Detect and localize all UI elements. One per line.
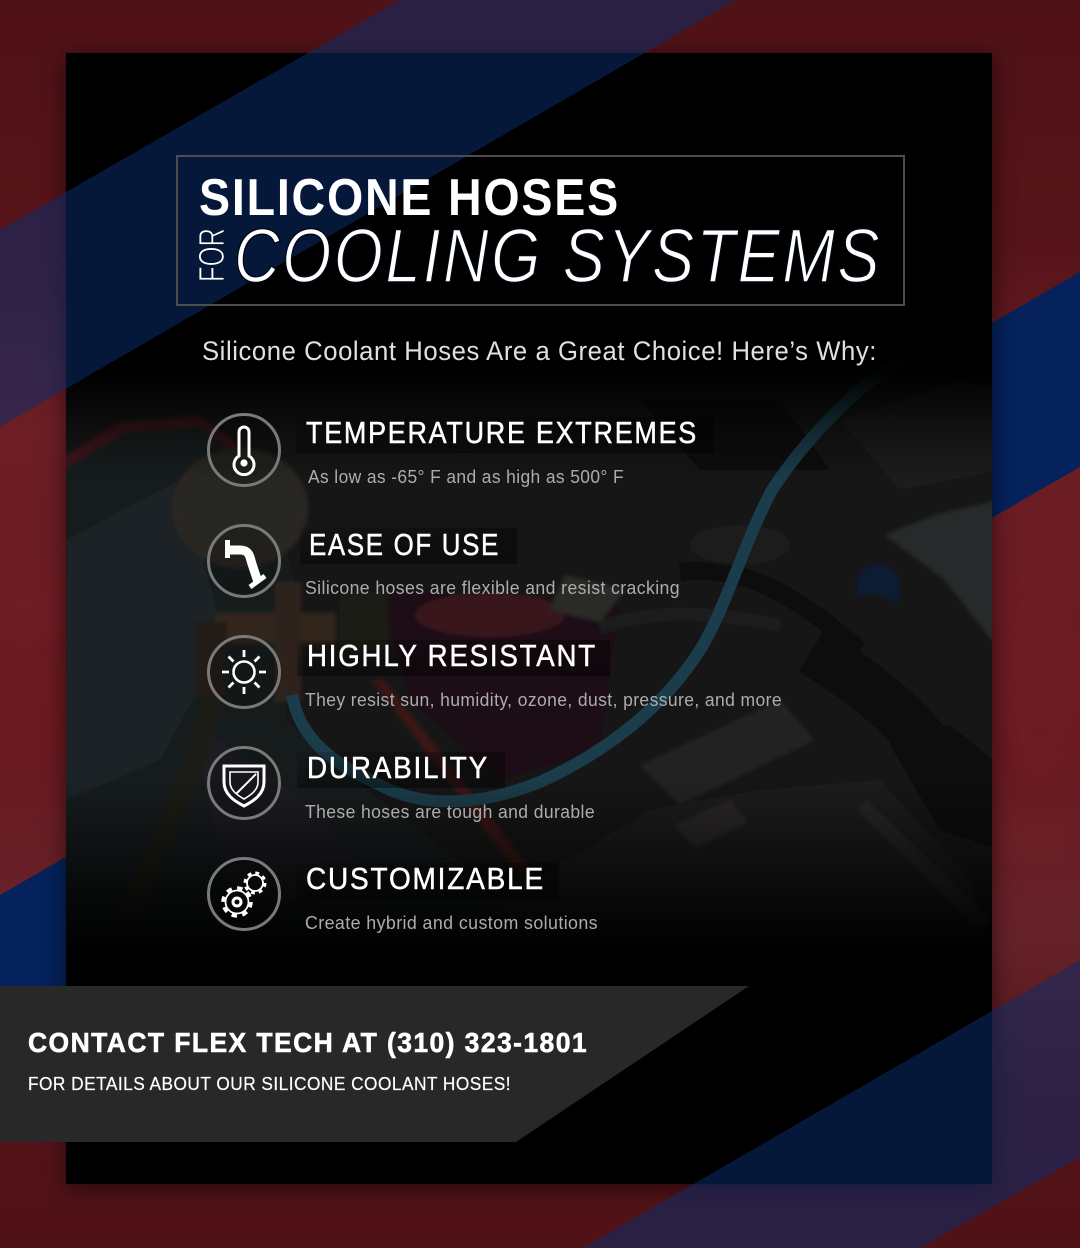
brass pipe fittings [215, 613, 335, 643]
heading: DURABILITY [307, 750, 489, 785]
contact phone line: CONTACT FLEX TECH AT (310) 323-1801 [28, 1027, 588, 1058]
vertical fades [66, 355, 992, 980]
translucent diagonal band: top left [0, 0, 736, 427]
heading backdrop [297, 863, 559, 900]
title: cooling systems: COOLING SYSTEMS [234, 214, 882, 299]
fuse box right [890, 726, 992, 794]
contact details line: FOR DETAILS ABOUT OUR SILICONE COOLANT HOSES! [28, 1073, 511, 1094]
description: As low as -65° F and as high as 500° F [308, 467, 624, 487]
heading: HIGHLY RESISTANT [307, 638, 597, 673]
description: They resist sun, humidity, ozone, dust, pressure, and more [305, 690, 782, 710]
item: ease of use [208, 526, 680, 598]
icon: shield [208, 748, 280, 818]
heading backdrop [296, 417, 714, 453]
diagonal band: solid blue behind panel [0, 272, 1080, 1090]
subtitle: Silicone Coolant Hoses Are a Great Choice! Here’s Why: [202, 336, 877, 366]
title: silicone hoses: SILICONE HOSES [199, 169, 620, 227]
description: Silicone hoses are flexible and resist cracking [305, 578, 680, 598]
heading backdrop [300, 528, 517, 564]
olive hose [194, 725, 214, 770]
description: These hoses are tough and durable [305, 802, 595, 822]
icon: sun [208, 636, 280, 708]
gauge [172, 448, 308, 568]
icon: bent hose [208, 526, 280, 596]
title: for (rotated): FOR [191, 228, 232, 282]
contact banner [0, 986, 749, 1142]
battery [542, 900, 554, 907]
corrugated black hose [812, 650, 935, 755]
icon: thermometer [208, 414, 280, 486]
item: durability [208, 748, 595, 822]
engine photo [66, 380, 992, 916]
item: customizable [208, 858, 598, 933]
item: highly resistant [208, 636, 782, 710]
cables [680, 571, 860, 650]
blue hose [286, 385, 874, 808]
icon: gears [208, 858, 280, 930]
grey shroud [887, 502, 992, 640]
upper engine bay [698, 467, 828, 470]
heading: CUSTOMIZABLE [306, 861, 545, 896]
heading: TEMPERATURE EXTREMES [306, 415, 698, 450]
translucent diagonal band: bottom right [583, 960, 1080, 1248]
heading: EASE OF USE [309, 527, 500, 562]
heading backdrop [297, 752, 505, 788]
item: temperature extremes [208, 414, 714, 487]
description: Create hybrid and custom solutions [305, 913, 598, 933]
title frame [177, 156, 904, 305]
jacket [50, 420, 560, 990]
main black panel [66, 53, 992, 1184]
heading backdrop [297, 640, 610, 676]
panel shadow [66, 57, 992, 1188]
red component [380, 590, 620, 780]
